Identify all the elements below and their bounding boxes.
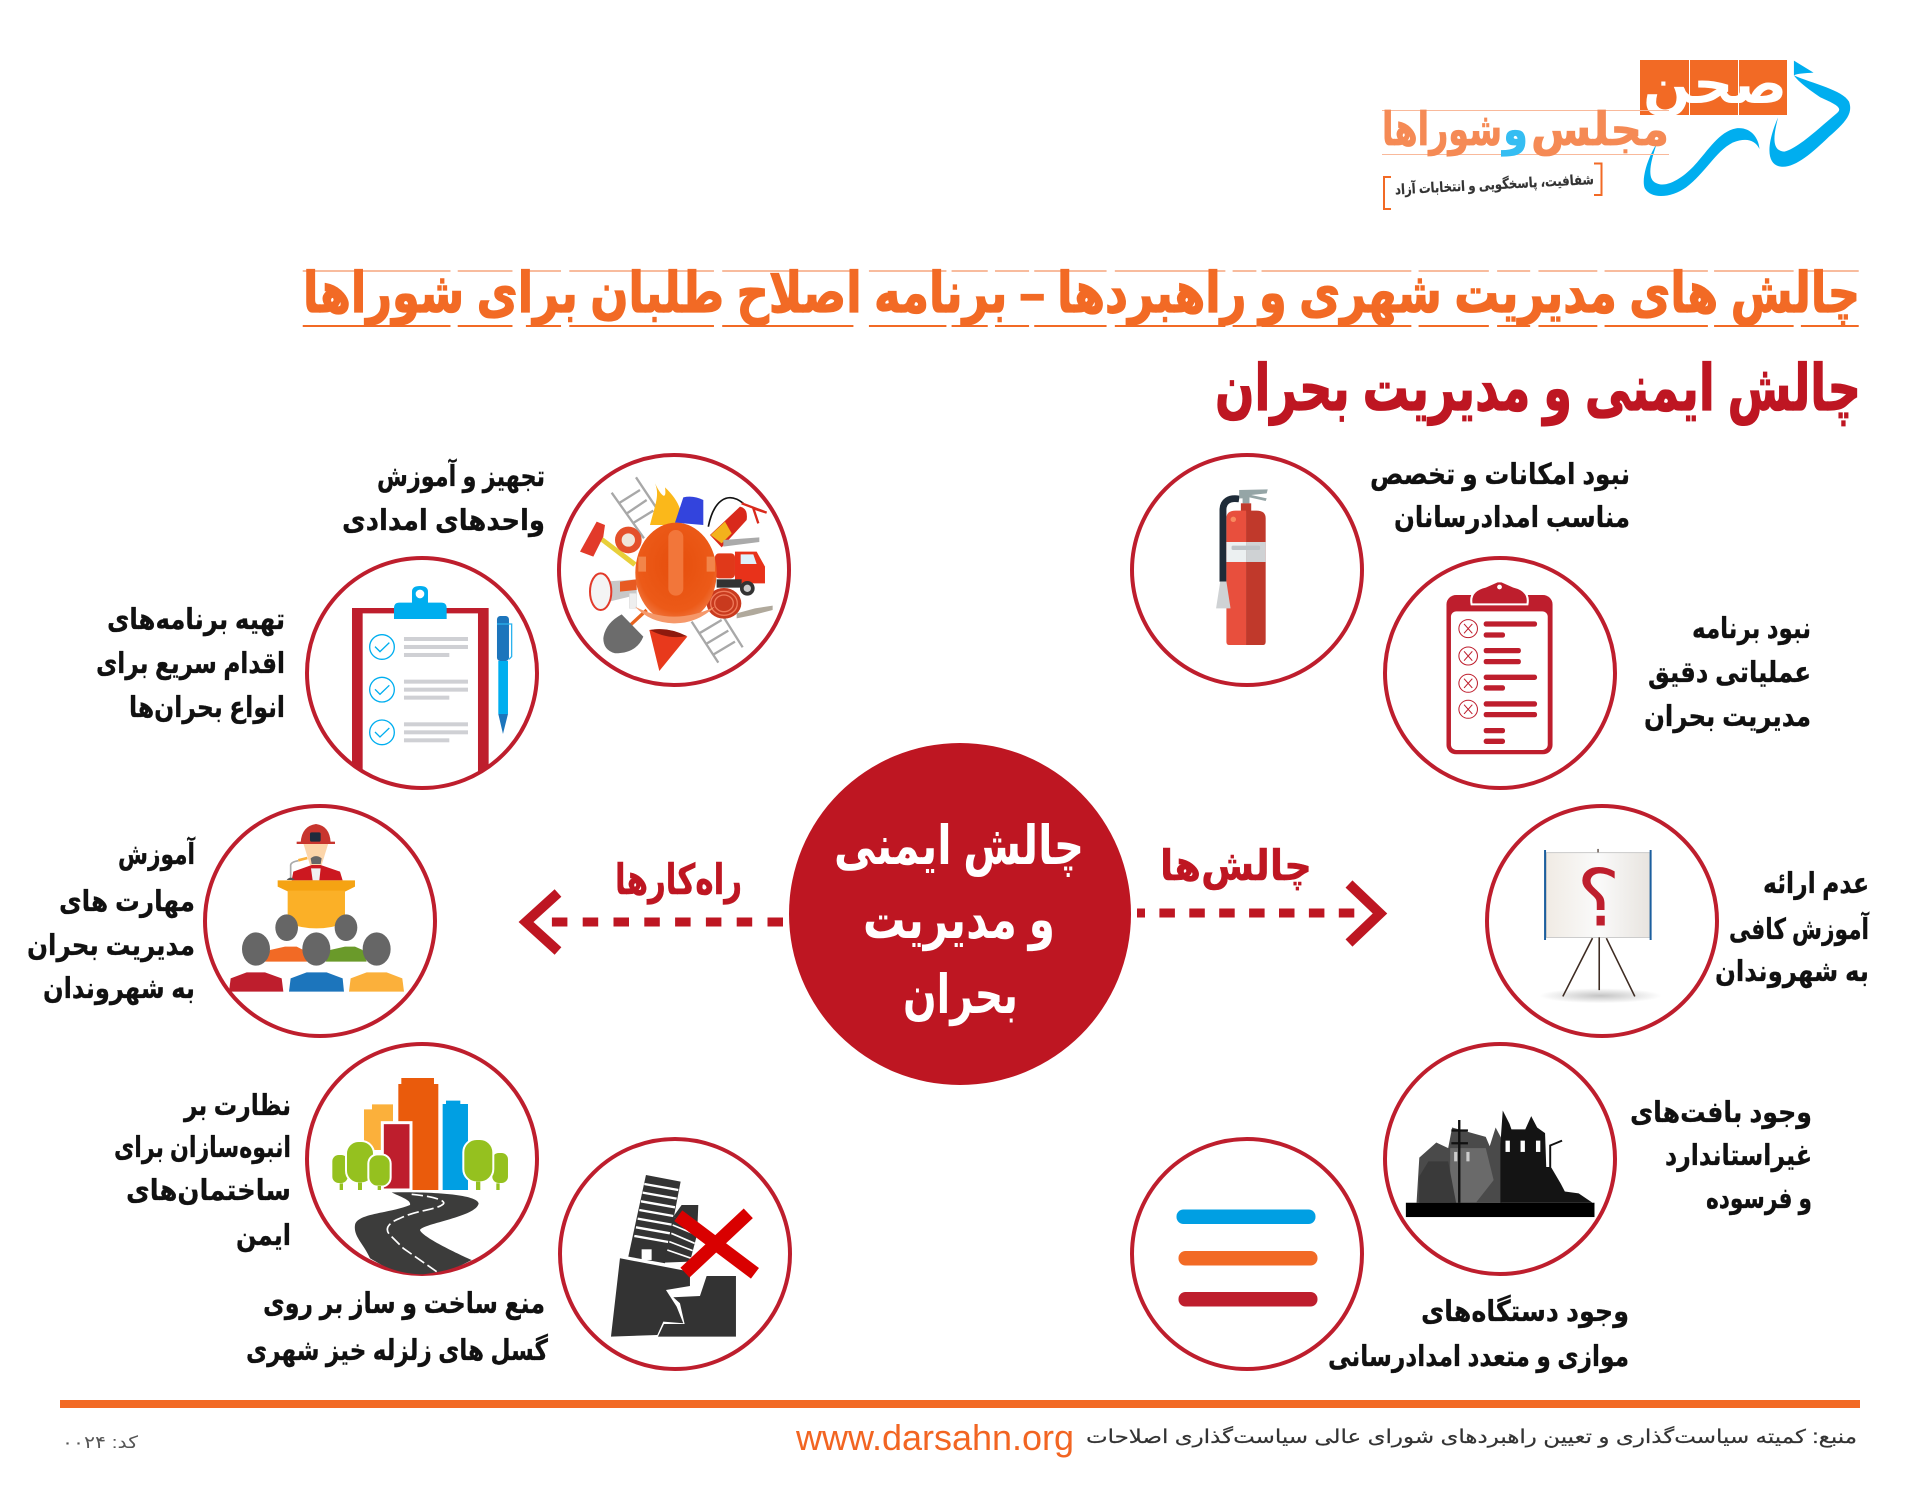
label: مدیریت بحران: [1644, 701, 1811, 733]
arrow: challenges: چالش‌ها: [1160, 842, 1312, 891]
logo: tagline: [1384, 164, 1602, 209]
icon: three bars: [1176, 1210, 1318, 1306]
panel: challenge training: [1487, 806, 1870, 1036]
label: اقدام سریع برای: [96, 648, 285, 680]
label: [27, 836, 196, 1005]
label: تجهیز و آموزش: [377, 458, 545, 493]
label: غیراستاندارد: [1665, 1140, 1812, 1172]
label: تهیه برنامه‌های: [107, 604, 285, 636]
panel: solution fault line ban: [246, 1139, 790, 1369]
central circle: چالش ایمنی: [834, 816, 1084, 877]
panel: challenge ruined fabric: [1385, 1044, 1812, 1274]
logo: tagline: شفافیت، پاسخگویی و انتخابات آزاد: [1395, 170, 1594, 198]
panel: solution plans: [96, 558, 537, 788]
logo: [1382, 52, 1850, 209]
label: آموزش: [118, 836, 196, 871]
label: عملیاتی دقیق: [1648, 657, 1811, 689]
label: وجود دستگاه‌های: [1421, 1294, 1629, 1328]
arrow: solutions: راه‌کارها: [615, 856, 742, 904]
panel: solution equipment: [342, 455, 789, 685]
label: انبوه‌سازان برای: [114, 1132, 291, 1164]
arrow: solutions: [526, 856, 783, 951]
icon: easel with question mark: ؟: [1576, 855, 1620, 943]
label: واحدهای امدادی: [342, 505, 545, 537]
label: مدیریت بحران: [27, 930, 195, 962]
label: [1644, 613, 1811, 733]
footer: code: کد: ۰۰۲۴: [62, 1433, 139, 1452]
icon: checklist clipboard and pen: [352, 586, 512, 774]
label: نبود برنامه: [1692, 613, 1811, 645]
icon: fire extinguisher: [1216, 489, 1268, 645]
label: و فرسوده: [1706, 1183, 1812, 1215]
label: [342, 458, 545, 537]
label: [96, 604, 285, 724]
icon: red clipboard: [1446, 581, 1553, 754]
central circle: و مدیریت: [863, 890, 1055, 951]
label: [1370, 459, 1630, 534]
logo: orange block: صحن: [1643, 52, 1787, 117]
panel: solution safe construction: [114, 1044, 537, 1274]
label: به شهروندان: [43, 973, 195, 1005]
label: ایمن: [236, 1220, 291, 1252]
logo: council wordmark: [1382, 103, 1669, 156]
label: [246, 1288, 548, 1367]
icon: firefighting gear: [580, 477, 773, 671]
footer: source: منبع: کمیته سیاست‌گذاری و تعیین راهبردهای شورای عالی سیاست‌گذاری اصلاحات: [1086, 1425, 1857, 1448]
label: عدم ارائه: [1763, 868, 1869, 900]
label: نظارت بر: [182, 1090, 291, 1122]
central circle: [789, 743, 1131, 1085]
panel: challenge parallel agencies: [1132, 1139, 1629, 1373]
label: نبود امکانات و تخصص: [1370, 459, 1630, 491]
label: گسل های زلزله خیز شهری: [246, 1333, 548, 1367]
icon: speaker and audience: [229, 824, 404, 992]
label: وجود بافت‌های: [1630, 1097, 1812, 1129]
label: مناسب امدادرسانان: [1394, 502, 1630, 534]
central circle: بحران: [903, 965, 1018, 1026]
icon: building on fault with cross: [611, 1175, 755, 1337]
arrow: challenges: [1137, 842, 1380, 943]
label: منع ساخت و ساز بر روی: [263, 1288, 545, 1320]
label: آموزش کافی: [1729, 911, 1870, 946]
logo: council wordmark: و: [1501, 103, 1528, 156]
icon: easel with question mark: [1539, 849, 1662, 1003]
label: [1328, 1294, 1629, 1373]
label: [114, 1090, 291, 1252]
logo: council wordmark: مجلس: [1531, 103, 1669, 156]
logo: blue swoosh: [1644, 61, 1850, 196]
label: ساختمان‌های: [126, 1175, 291, 1207]
panel: challenge clipboard: [1385, 558, 1811, 788]
label: مهارت های: [59, 886, 195, 918]
footer rule: [60, 1400, 1860, 1408]
icon: city and road: [331, 1078, 509, 1274]
label: انواع بحران‌ها: [129, 692, 285, 724]
label: [1630, 1097, 1812, 1215]
icon: ruined buildings: [1406, 1111, 1594, 1217]
label: [1715, 868, 1870, 988]
panel: challenge extinguisher: [1132, 455, 1630, 685]
footer: website: www.darsahn.org: [795, 1417, 1074, 1458]
label: به شهروندان: [1715, 956, 1869, 988]
label: موازی و متعدد امدادرسانی: [1328, 1341, 1629, 1373]
panel: solution public training: [27, 806, 435, 1036]
logo: council wordmark: شوراها: [1382, 103, 1502, 156]
